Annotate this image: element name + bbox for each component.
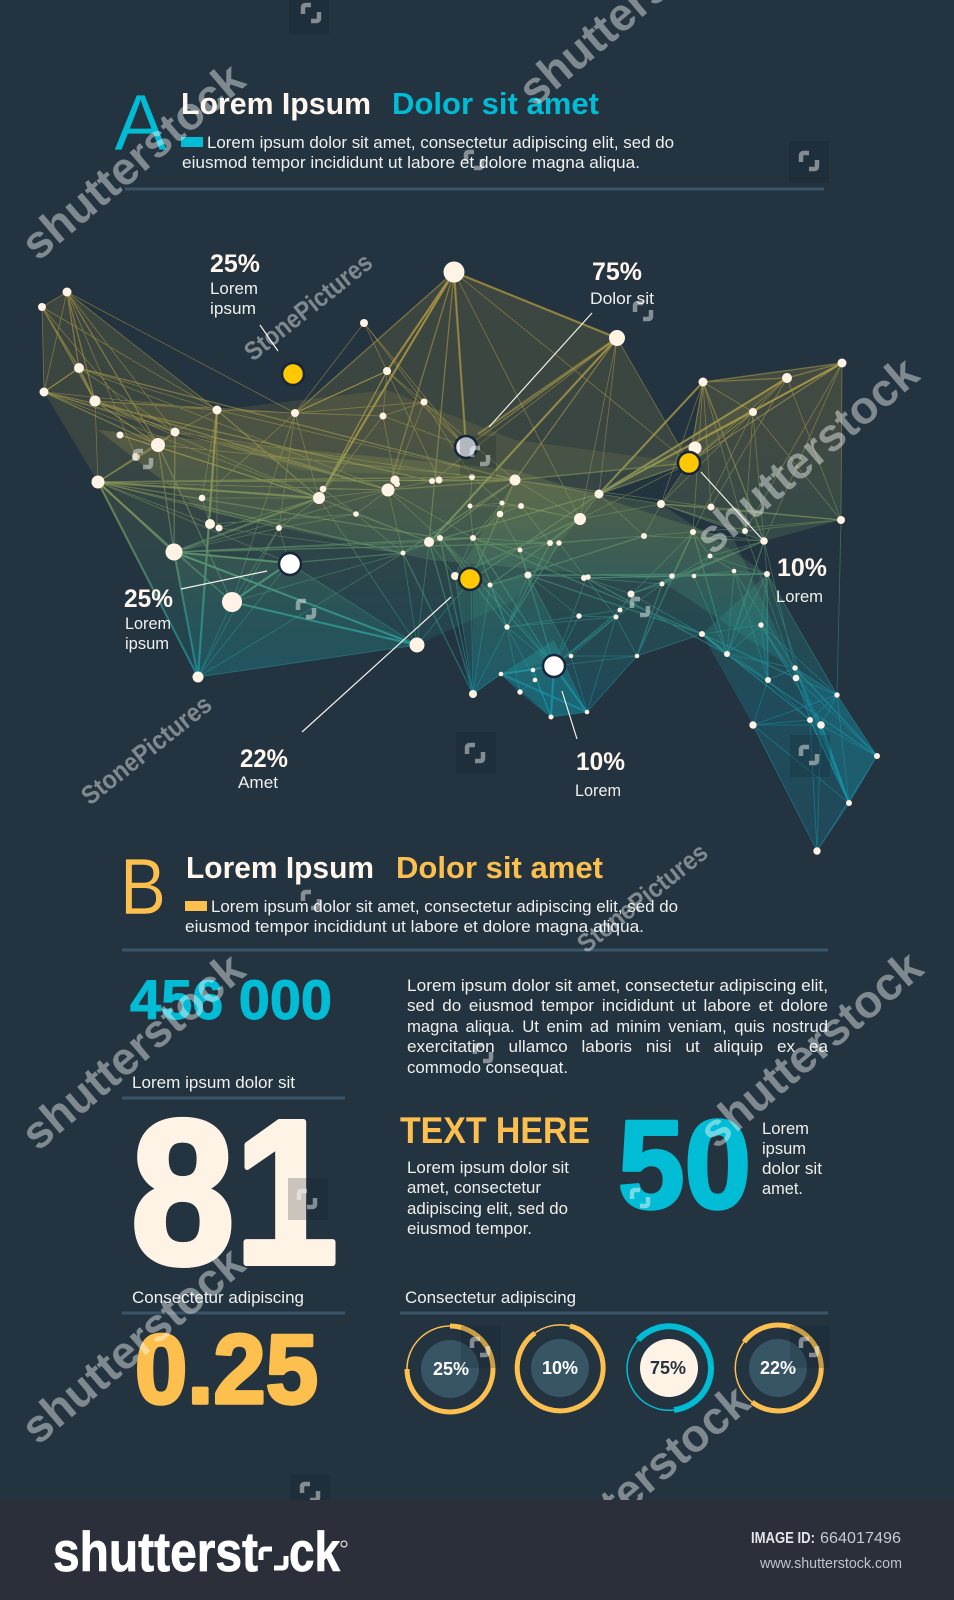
network lines thick [79, 272, 849, 803]
callout: 75%: 75% [592, 258, 642, 286]
heading: TEXT HERE: TEXT HERE [400, 1110, 590, 1151]
watermark: StonePictures text: StonePictures [571, 837, 713, 959]
label: Consectetur adipiscing right: Consectetur adipiscing [405, 1288, 576, 1307]
watermark: shutterstock text: shutterstock [11, 1236, 255, 1454]
network nodes [38, 262, 880, 855]
watermark: shutterstock text: shutterstock [11, 942, 255, 1160]
footer image id: IMAGE ID: [751, 1530, 815, 1547]
map fill [42, 272, 877, 851]
callout: 25% top: Lorem [210, 279, 258, 298]
callout: 25% left: ipsum [125, 634, 169, 653]
callout: 75%: Dolor sit [590, 289, 654, 308]
watermark: bracket icons [135, 5, 817, 1500]
watermark: StonePictures text: StonePictures [75, 689, 217, 811]
footer bar [0, 1500, 954, 1600]
footer image id [751, 1530, 902, 1572]
donut 75% [627, 1326, 711, 1410]
callout: 10% bottom: 10% [576, 748, 625, 776]
donut 22%: 22% [760, 1358, 796, 1378]
watermark: shutterstock text: shutterstock [685, 346, 929, 564]
callout: 10% right [776, 554, 827, 606]
heading: Lorem Ipsum: Lorem Ipsum [181, 86, 371, 121]
stat: 81: 81 [131, 1078, 338, 1307]
donut 75%: 75% [650, 1358, 686, 1378]
callout: 10% bottom [575, 748, 625, 800]
donut 25% [407, 1326, 493, 1412]
text block: body paragraph: commodo consequat. [407, 1058, 568, 1077]
label: Consectetur adipiscing left: Consectetur adipiscing [132, 1288, 304, 1307]
heading: Lorem Ipsum: Lorem Ipsum [186, 850, 374, 885]
watermark: StonePictures text [75, 247, 713, 959]
footer logo: ck [289, 1520, 341, 1583]
callout: 25% left: 25% [124, 585, 173, 613]
intro text: Lorem ipsum dolor sit amet, consectetur adipiscing elit, sed do [207, 133, 674, 152]
callout: 25% top: 25% [210, 250, 260, 278]
watermark: dark squares [288, 0, 830, 1516]
donut 22% [735, 1325, 821, 1411]
text block: TEXT HERE paragraph: Lorem ipsum dolor sit [407, 1158, 569, 1177]
callout: 22%: Amet [238, 773, 278, 792]
letter A: A [114, 78, 168, 167]
callout: 22% [238, 745, 288, 792]
donut 25%: 25% [433, 1359, 469, 1379]
stat: 0.25: 0.25 [135, 1314, 318, 1424]
stat: 50: 50 [618, 1096, 751, 1235]
callout: 25% left: Lorem [125, 614, 171, 633]
text block: TEXT HERE paragraph: amet, consectetur [407, 1178, 541, 1197]
letter B: B [120, 842, 166, 931]
text block: body paragraph: exercitation ullamco laboris nisi ut aliquip ex ea [407, 1037, 829, 1056]
section A header [114, 78, 674, 172]
text block: 50 caption: Lorem [762, 1119, 809, 1138]
footer logo: shutterst [53, 1520, 258, 1583]
section B header [120, 842, 678, 936]
intro text: eiusmod tempor incididunt ut labore et dolore magna aliqua. [182, 153, 640, 172]
intro text: Lorem ipsum dolor sit amet, consectetur adipiscing elit, sed do [211, 897, 678, 916]
network map [38, 262, 880, 855]
callout: 10% bottom: Lorem [575, 781, 621, 800]
callout: 25% top: ipsum [210, 299, 256, 318]
text block: body paragraph: sed do eiusmod tempor incididunt ut labore et dolore [407, 996, 828, 1015]
accent bar [185, 901, 207, 911]
accent bar [181, 137, 203, 147]
text block: body paragraph: Lorem ipsum dolor sit amet, consectetur adipiscing elit, [407, 976, 828, 995]
heading: Dolor sit amet: Dolor sit amet [396, 850, 603, 885]
highlighted markers [279, 363, 700, 677]
donut charts [407, 1325, 821, 1412]
text block: TEXT HERE paragraph: adipiscing elit, sed do [407, 1199, 568, 1218]
callout leader lines [181, 313, 762, 739]
callout: 25% top [210, 250, 260, 318]
label: Lorem ipsum dolor sit: Lorem ipsum dolor sit [132, 1073, 295, 1092]
network lines thin [42, 272, 877, 851]
stat: 456 000: 456 000 [130, 968, 332, 1031]
network lines medium [42, 272, 877, 803]
text block: body paragraph: magna aliqua. Ut enim ad minim veniam, quis nostrud [407, 1017, 828, 1036]
heading: Dolor sit amet: Dolor sit amet [392, 86, 599, 121]
text block: 50 caption: dolor sit [762, 1159, 822, 1178]
footer image id: www.shutterstock.com [759, 1555, 902, 1572]
donut 10%: 10% [542, 1358, 578, 1378]
watermark: shutterstock text: shutterstock [516, 1374, 760, 1592]
callout: 25% left [124, 585, 173, 653]
callout: 75% [590, 258, 654, 308]
callout: 22%: 22% [240, 745, 288, 773]
watermark: shutterstock text: shutterstock [689, 940, 933, 1158]
footer image id: 664017496 [820, 1530, 901, 1547]
watermark: StonePictures text: StonePictures [238, 247, 378, 367]
text block: 50 caption: ipsum [762, 1139, 806, 1158]
callout: 10% right: 10% [777, 554, 827, 582]
donut 10% [517, 1325, 603, 1411]
text block: 50 caption: amet. [762, 1179, 803, 1198]
text block: TEXT HERE paragraph: eiusmod tempor. [407, 1219, 532, 1238]
callout: 10% right: Lorem [776, 587, 823, 606]
watermark: shutterstock text: shutterstock [11, 52, 255, 270]
intro text: eiusmod tempor incididunt ut labore et dolore magna aliqua. [185, 917, 644, 936]
